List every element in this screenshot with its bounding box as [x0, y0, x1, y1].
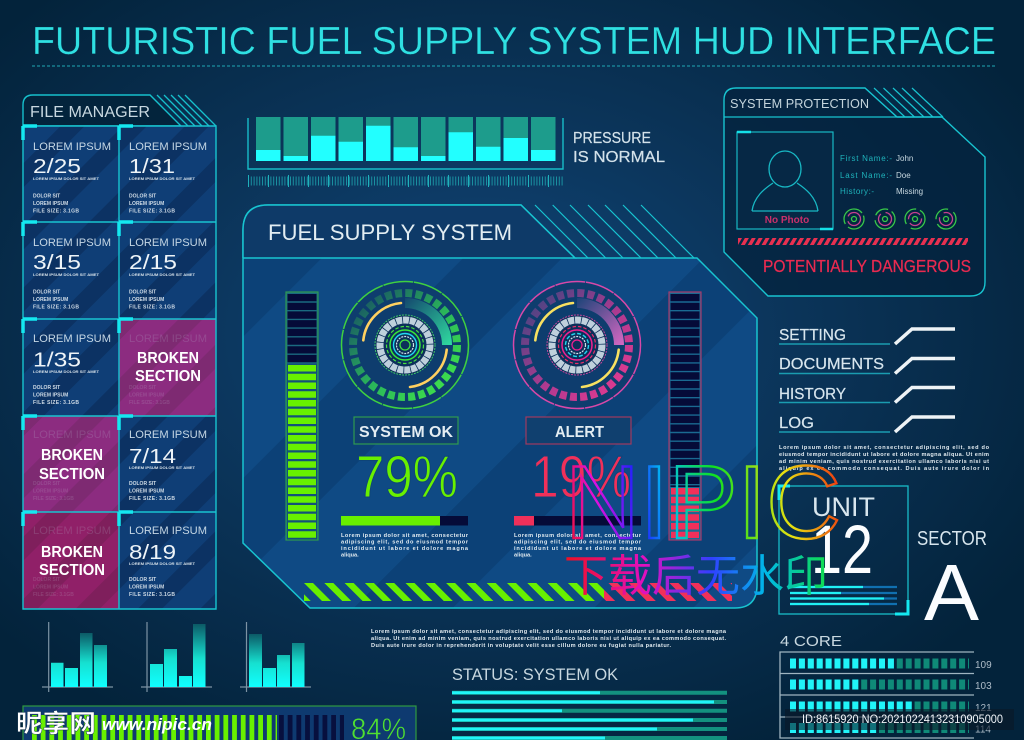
file card 1/31: [119, 126, 216, 222]
broken section card row 3: [119, 319, 216, 416]
text block: alert: Lorem ipsum dolor sit amet, consectetur: [514, 533, 642, 539]
text block: center description: aliqua. Ut enim ad minim veniam, quis nostrud exercitation ullamco laboris nisi ut aliquip ex ea commodo consequat.: [371, 636, 726, 642]
text block: alert: [514, 533, 642, 558]
menu: log: [779, 415, 955, 432]
watermark: chinese caption: 下载后无水印: [564, 540, 828, 604]
file card 2/15: LOREM IPSUM DOLOR SIT AMET: [129, 273, 196, 277]
watermark: site logo: www.nipic.cn: [102, 715, 212, 734]
file card 3/15: LOREM IPSUM: [33, 237, 111, 249]
value: 79%: 79%: [356, 444, 458, 510]
panel: unit 12: UNIT: [812, 492, 875, 522]
file card 2/25: LOREM IPSUM: [33, 141, 111, 153]
photo frame: [737, 132, 833, 229]
panel: fuel supply system: [243, 205, 757, 608]
broken section card row 5: FILE SIZE: 3.1GB: [33, 592, 74, 598]
menu: log: LOG: [779, 415, 814, 432]
person details: Missing: [896, 187, 923, 196]
sector label: [917, 527, 987, 637]
warning stripes: [738, 238, 968, 245]
panel: 84 percent bar: [23, 706, 416, 740]
value: 19%: 19%: [531, 444, 631, 510]
panel: file manager: [23, 95, 216, 609]
panel: unit 12: 12: [811, 511, 873, 588]
text block: menu description: aliquip ex ea commodo consequat. Duis aute irure dolor in: [779, 466, 990, 472]
panel heading: SYSTEM PROTECTION: [730, 97, 869, 111]
menu: history: HISTORY: [779, 386, 846, 403]
panel heading: FUEL SUPPLY SYSTEM: [268, 220, 512, 245]
text block: center description: [371, 629, 727, 649]
panel: status: [452, 665, 727, 738]
menu: history: [779, 386, 955, 403]
file card 2/15: [119, 222, 216, 319]
broken section card row 5: DOLOR SIT: [33, 577, 60, 583]
file card 2/25: LOREM IPSUM DOLOR SIT AMET: [33, 177, 100, 181]
file manager header: [23, 95, 216, 126]
file card 7/14: LOREM IPSUM DOLOR SIT AMET: [129, 466, 196, 470]
broken section card row 5: SECTION: [39, 562, 105, 579]
pressure label: [573, 130, 665, 166]
watermark: image id: [785, 709, 1014, 730]
broken section card row 4: FILE SIZE: 3.1GB: [33, 496, 74, 502]
watermark: NIPIC: NIPIC: [565, 445, 841, 561]
file card 7/14: FILE SIZE: 3.1GB: [129, 496, 175, 502]
broken section card row 3: BROKEN: [137, 350, 199, 367]
progress bar: 19: [514, 516, 641, 526]
broken section card row 3: SECTION: [135, 368, 201, 385]
text block: alert: aliqua.: [514, 552, 532, 558]
file card 7/14: 7/14: [129, 445, 176, 468]
file card 1/35: [23, 319, 119, 416]
person details: First Name:-: [840, 154, 892, 163]
file card 8/19: FILE SIZE: 3.1GB: [129, 592, 175, 598]
file card 8/19: LOREM IPSUM: [129, 584, 164, 590]
status label: alert: [526, 417, 631, 444]
broken section card row 5: LOREM IPSUM: [33, 525, 111, 537]
file card 1/35: 1/35: [33, 348, 81, 372]
file card 2/15: LOREM IPSUM: [129, 297, 164, 303]
fingerprint icons: [844, 209, 956, 229]
menu: setting: SETTING: [779, 327, 846, 344]
person details: Last Name:-: [840, 171, 892, 180]
file card 8/19: LOREM IPSUM: [129, 525, 207, 537]
panel: status: STATUS: SYSTEM OK: [452, 665, 619, 684]
text block: system ok: incididunt ut labore et dolore magna: [341, 546, 469, 552]
file card 3/15: 3/15: [33, 251, 81, 274]
bar chart 3: [240, 622, 311, 692]
file card 1/31: LOREM IPSUM DOLOR SIT AMET: [129, 177, 196, 181]
file card 1/35: FILE SIZE: 3.1GB: [33, 400, 79, 406]
text block: alert: adipiscing elit, sed do eiusmod tempor: [514, 540, 642, 546]
gauge: alert: [514, 282, 640, 408]
person details: [840, 154, 923, 196]
watermark: image id: ID:8615920 NO:20210224132310905000: [802, 714, 1003, 726]
text block: menu description: [779, 445, 990, 472]
broken section card row 3: LOREM IPSUM: [129, 392, 164, 398]
file card 7/14: [119, 416, 216, 512]
hazard stripes: [304, 583, 732, 601]
status label: system ok: [354, 417, 458, 444]
file card 1/35: LOREM IPSUM: [33, 333, 111, 345]
file card 3/15: LOREM IPSUM: [33, 297, 68, 303]
photo frame: No Photo: [765, 215, 809, 226]
file card 1/31: 1/31: [129, 155, 175, 178]
text block: menu description: Lorem ipsum dolor sit amet, consectetur adipiscing elit, sed do: [779, 445, 990, 451]
file card 1/31: FILE SIZE: 3.1GB: [129, 208, 175, 214]
file card 1/31: LOREM IPSUM: [129, 141, 207, 153]
text block: center description: Lorem ipsum dolor sit amet, consectetur adipiscing elit, sed do eiusmod tempor incididunt ut labore et dolore magna: [371, 629, 727, 635]
text block: center description: Duis aute irure dolor in reprehenderit in voluptate velit esse cillum dolore eu fugiat nulla pariatur.: [371, 643, 671, 649]
pressure label: IS NORMAL: [573, 149, 665, 166]
file card 2/15: LOREM IPSUM: [129, 237, 207, 249]
core row 121: 121: [975, 703, 992, 714]
broken section card row 5: [23, 512, 119, 609]
panel: system protection: [724, 88, 985, 296]
text block: system ok: adipiscing elit, sed do eiusmod tempor: [341, 540, 469, 546]
text block: menu description: ad minim veniam, quis nostrud exercitation ullamco laboris nisi ut: [779, 459, 989, 465]
file card 8/19: LOREM IPSUM DOLOR SIT AMET: [129, 562, 196, 566]
panel: pressure chart: [248, 117, 563, 181]
watermark: site logo: [16, 710, 212, 738]
file card 1/35: LOREM IPSUM DOLOR SIT AMET: [33, 370, 100, 374]
broken section card row 4: LOREM IPSUM: [33, 429, 111, 441]
file card 7/14: DOLOR SIT: [129, 481, 156, 487]
file card 1/31: LOREM IPSUM: [129, 201, 164, 207]
file card 2/15: DOLOR SIT: [129, 290, 156, 296]
text block: alert: incididunt ut labore et dolore magna: [514, 546, 642, 552]
broken section card row 5: BROKEN: [41, 544, 103, 561]
file card 3/15: [23, 222, 119, 319]
warning text: POTENTIALLY DANGEROUS: [763, 256, 971, 276]
core row 114: 114: [975, 724, 991, 736]
file card 2/25: FILE SIZE: 3.1GB: [33, 208, 79, 214]
text block: system ok: aliqua.: [341, 552, 359, 558]
file card 1/31: DOLOR SIT: [129, 194, 156, 200]
broken section card row 4: [23, 416, 119, 512]
watermark: site logo: 昵享网: [16, 710, 96, 738]
file card 2/25: [23, 126, 119, 222]
person details: History:-: [840, 187, 874, 196]
status label: system ok: SYSTEM OK: [359, 424, 454, 441]
broken section card row 3: FILE SIZE: 3.1GB: [129, 400, 170, 406]
text block: menu description: eiusmod tempor incididunt ut labore et dolore magna aliqua. Ut enim: [779, 452, 989, 458]
gauge: system ok: [342, 282, 468, 408]
file manager header: FILE MANAGER: [30, 104, 150, 121]
file card 1/35: LOREM IPSUM: [33, 392, 68, 398]
broken section card row 4: BROKEN: [41, 447, 103, 464]
panel: unit 12: [779, 486, 908, 614]
broken section card row 4: SECTION: [39, 466, 105, 483]
menu list: [779, 327, 955, 432]
broken section card row 4: DOLOR SIT: [33, 481, 60, 487]
file card 8/19: DOLOR SIT: [129, 577, 156, 583]
text block: system ok: Lorem ipsum dolor sit amet, consectetur: [341, 533, 469, 539]
menu: documents: [779, 356, 955, 374]
progress bar: 79: [341, 516, 468, 526]
menu: documents: DOCUMENTS: [779, 356, 884, 373]
broken section card row 3: LOREM IPSUM: [129, 333, 207, 345]
panel: 4 core: [780, 633, 992, 738]
bar chart 1: [42, 622, 113, 692]
person details: John: [896, 154, 913, 163]
file card 8/19: [119, 512, 216, 609]
bar chart 2: [141, 622, 212, 692]
file card 7/14: LOREM IPSUM: [129, 488, 164, 494]
title: FUTURISTIC FUEL SUPPLY SYSTEM HUD INTERFACE: [32, 20, 996, 63]
file card 2/15: FILE SIZE: 3.1GB: [129, 304, 175, 310]
left level bar: [286, 292, 318, 540]
text block: system ok: [341, 533, 469, 558]
file card 1/35: DOLOR SIT: [33, 385, 60, 391]
broken section card row 5: LOREM IPSUM: [33, 584, 68, 590]
file card 2/25: 2/25: [33, 155, 81, 178]
file card 2/25: LOREM IPSUM: [33, 201, 68, 207]
file card 2/15: 2/15: [129, 251, 177, 274]
status label: alert: ALERT: [555, 424, 604, 441]
sector label: SECTOR: [917, 527, 987, 550]
pressure label: PRESSURE: [573, 130, 651, 147]
core row 109: 109: [975, 660, 992, 671]
menu: setting: [779, 327, 955, 344]
file card 3/15: LOREM IPSUM DOLOR SIT AMET: [33, 273, 100, 277]
broken section card row 3: DOLOR SIT: [129, 385, 156, 391]
person details: Doe: [896, 171, 911, 180]
file card 3/15: DOLOR SIT: [33, 290, 60, 296]
broken section card row 4: LOREM IPSUM: [33, 488, 68, 494]
file card 7/14: LOREM IPSUM: [129, 429, 207, 441]
file card 2/25: DOLOR SIT: [33, 194, 60, 200]
core row 103: 103: [975, 681, 992, 692]
right level bar: [669, 292, 701, 540]
file card 3/15: FILE SIZE: 3.1GB: [33, 304, 79, 310]
panel: 4 core: 4 CORE: [780, 633, 842, 650]
sector label: A: [924, 548, 980, 637]
file card 8/19: 8/19: [129, 541, 176, 564]
